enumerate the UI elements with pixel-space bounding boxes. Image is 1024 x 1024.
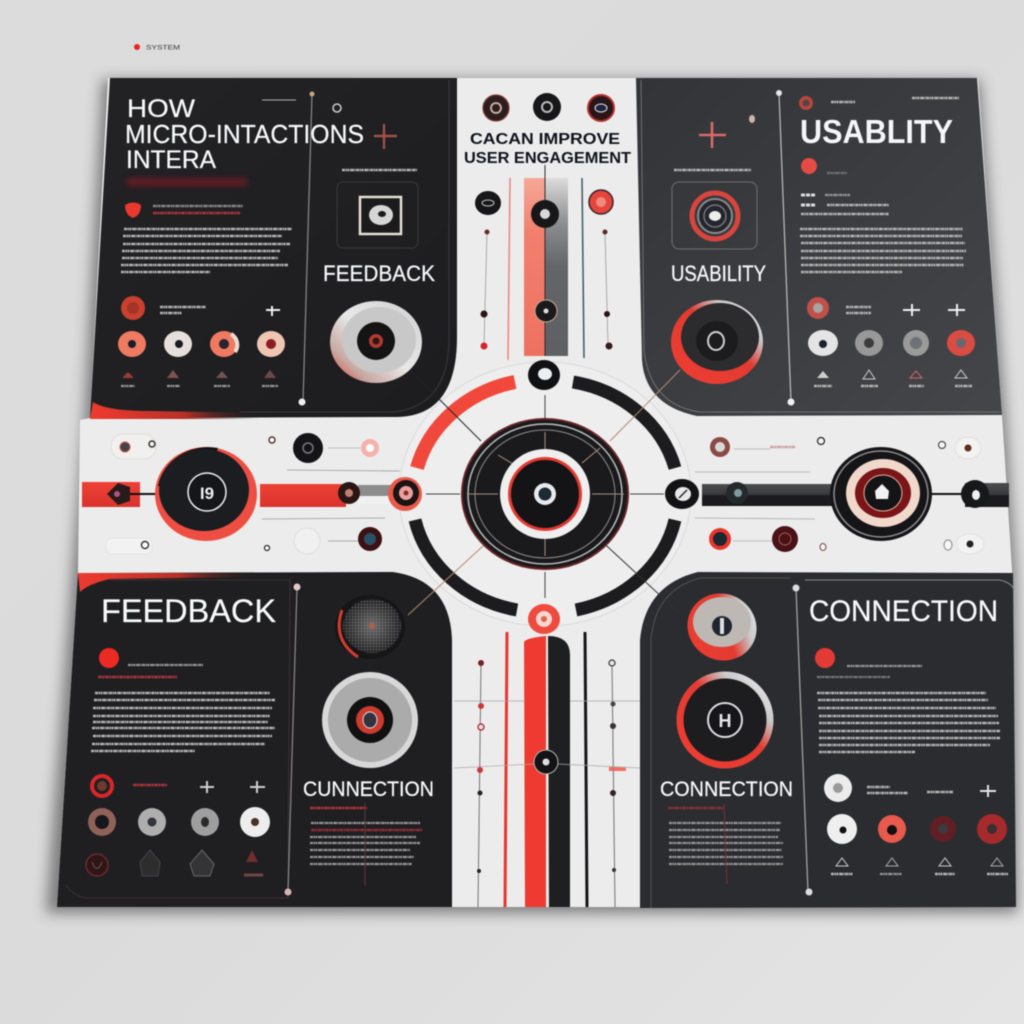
tiny top-left caption xyxy=(134,44,180,52)
header icons and captions xyxy=(799,96,959,174)
bottom hub button xyxy=(528,604,560,634)
big black red-rim knob: I9 xyxy=(200,484,214,503)
plus icon xyxy=(699,122,726,148)
tiny top-left caption: SYSTEM xyxy=(146,46,180,52)
three top buttons xyxy=(483,93,614,121)
dark bar right xyxy=(965,483,1009,507)
body text xyxy=(800,229,966,272)
row of four micro-interaction buttons xyxy=(808,330,975,356)
small dot xyxy=(749,115,755,123)
small header marks xyxy=(262,100,341,112)
top central column xyxy=(464,93,631,360)
inner edge line xyxy=(651,578,790,908)
small bar knob xyxy=(338,482,360,504)
shield icon xyxy=(125,202,141,218)
subhead lines xyxy=(153,206,243,213)
connecting line xyxy=(130,493,158,495)
large red-rim knob xyxy=(671,300,763,384)
vertical red and grey bars xyxy=(524,165,568,356)
central column heading xyxy=(464,131,631,167)
central column heading: USER ENGAGEMENT xyxy=(464,150,631,167)
microphone-mesh knob xyxy=(335,595,405,659)
vertical red and black bars xyxy=(524,636,570,907)
panel: bottom-left feedback xyxy=(57,572,452,907)
panel: top-left how micro-interactions xyxy=(90,78,457,419)
poster base sheet xyxy=(57,78,1015,907)
title: HOW xyxy=(127,95,195,123)
grey bar xyxy=(358,485,392,496)
row of four micro-interaction buttons xyxy=(88,807,270,837)
central hub diagram xyxy=(388,360,699,634)
body text xyxy=(817,693,1000,752)
big concentric knob xyxy=(830,447,932,541)
divider xyxy=(298,92,314,406)
body text xyxy=(91,693,275,751)
connection label: CONNECTION xyxy=(660,778,793,801)
row of four micro-interaction buttons xyxy=(118,331,285,357)
small knob on right bar xyxy=(961,480,989,508)
bottom central column xyxy=(454,632,640,907)
divider xyxy=(792,584,812,896)
silver ring knob xyxy=(322,672,418,768)
subhead lines xyxy=(801,195,889,214)
left and right dotted scales xyxy=(477,660,626,907)
panel: top-right usability xyxy=(636,78,1002,416)
big black red-rim knob xyxy=(155,447,257,541)
body text xyxy=(121,229,292,272)
list row header xyxy=(92,776,265,796)
row of small icons xyxy=(814,370,972,386)
plus icon xyxy=(374,124,397,149)
side text block xyxy=(668,804,783,884)
thin side rails xyxy=(505,632,587,907)
row of four micro-interaction buttons xyxy=(827,814,1007,844)
connection heading: CONNECTION xyxy=(809,595,998,628)
thin side rails xyxy=(508,178,584,360)
subhead lines xyxy=(98,665,203,677)
arc: black bottom-right xyxy=(576,520,675,610)
side text block xyxy=(310,803,422,885)
red corner glow xyxy=(78,573,260,592)
central dial xyxy=(461,418,629,570)
faint buttons above xyxy=(695,437,981,472)
subhead lines xyxy=(817,666,922,677)
inner edge line xyxy=(641,80,1000,412)
list row header xyxy=(824,774,996,802)
dotted side scales xyxy=(480,230,612,350)
bar knob xyxy=(534,750,558,774)
small dark tag knob xyxy=(107,483,130,505)
dark bar left xyxy=(702,484,837,506)
panel: bottom-right connection xyxy=(640,572,1016,908)
red bar right xyxy=(260,484,346,507)
list row header xyxy=(807,297,965,319)
red ring knob: H xyxy=(718,711,732,731)
feedback label: FEEDBACK xyxy=(323,261,435,286)
red bar left xyxy=(82,482,140,507)
small bar knob left xyxy=(726,482,748,504)
arc: black top-right xyxy=(573,382,675,468)
arc: black bottom-left xyxy=(415,520,517,610)
red ring knob xyxy=(680,675,770,765)
connection label: CUNNECTION xyxy=(303,778,434,801)
silver red-rim knob xyxy=(675,581,769,673)
right hub button xyxy=(665,479,699,509)
central column heading: CACAN IMPROVE xyxy=(470,131,620,148)
divider xyxy=(776,90,794,406)
faint buttons below xyxy=(106,518,385,554)
feature frame with ring icon xyxy=(672,182,757,249)
row of small icons xyxy=(831,858,1008,874)
panel inner edge line xyxy=(240,80,449,412)
red dot xyxy=(99,648,119,668)
feature frame with icon xyxy=(337,170,418,248)
side buttons xyxy=(475,190,613,215)
hub plate xyxy=(399,362,691,626)
arc: red top-left xyxy=(417,382,515,468)
divider xyxy=(284,584,300,896)
feedback heading: FEEDBACK xyxy=(101,593,276,629)
row of small icons xyxy=(121,370,278,386)
title xyxy=(125,95,364,174)
bar knobs xyxy=(531,200,559,322)
title: INTERA xyxy=(126,146,216,174)
left hub button xyxy=(388,477,422,511)
right horizontal band xyxy=(695,437,1009,554)
blurred red subhead xyxy=(127,178,247,186)
faint buttons below xyxy=(695,518,984,554)
large silver knob xyxy=(330,301,422,383)
poster shadow xyxy=(46,80,1018,913)
connecting line xyxy=(930,493,965,495)
red dot xyxy=(815,648,835,668)
faint buttons above xyxy=(111,433,400,471)
title: MICRO-INTACTIONS xyxy=(125,119,364,149)
faint fold lines xyxy=(454,701,640,768)
red glow at bottom edge xyxy=(90,402,260,419)
row of dark icons xyxy=(86,850,263,876)
usability label: USABILITY xyxy=(671,261,766,286)
diagonal connector lines xyxy=(408,370,680,615)
usability heading: USABLITY xyxy=(800,113,953,150)
caption line xyxy=(674,169,751,171)
list row header xyxy=(121,296,280,320)
inner panel outline xyxy=(66,580,290,898)
top hub button xyxy=(528,360,560,390)
left horizontal band xyxy=(82,433,400,554)
